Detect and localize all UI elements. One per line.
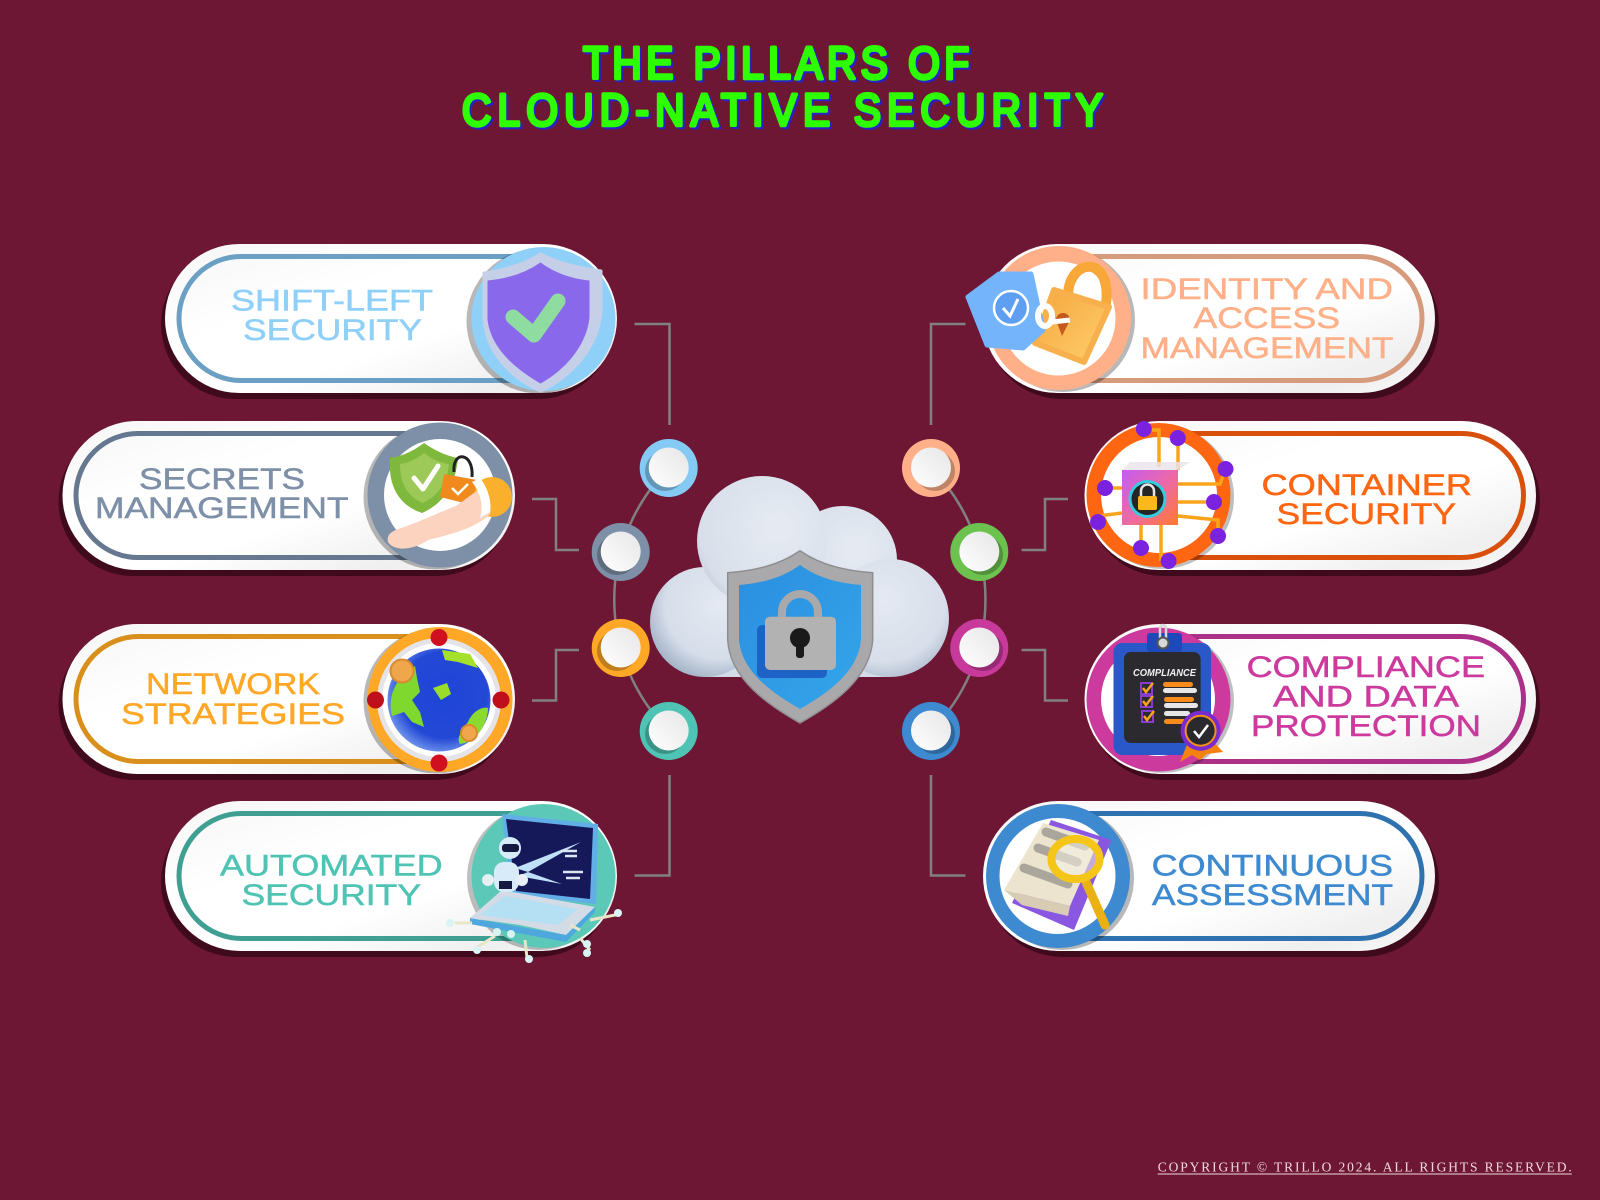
icon: secure chip	[1086, 421, 1234, 569]
node: continuous	[902, 702, 960, 760]
heading: identity and access management: ACCESS	[1194, 302, 1340, 335]
heading: secrets management: MANAGEMENT	[95, 492, 348, 525]
panel: continuous assessment	[983, 801, 1439, 957]
heading: compliance and data protection: AND DATA	[1273, 681, 1459, 714]
copyright: COPYRIGHT © TRILLO 2024. ALL RIGHTS RESERVED.	[1158, 1160, 1572, 1174]
node: secrets	[592, 523, 650, 581]
heading: secrets management: SECRETS	[139, 463, 305, 496]
heading: continuous assessment	[1152, 850, 1393, 912]
heading: identity and access management	[1140, 273, 1394, 365]
node: network	[592, 619, 650, 677]
heading: automated security: SECURITY	[242, 879, 421, 912]
heading: continuous assessment: CONTINUOUS	[1152, 850, 1393, 883]
title	[462, 38, 1103, 136]
heading: container security	[1262, 469, 1472, 531]
heading: continuous assessment: ASSESSMENT	[1152, 879, 1393, 912]
node: identity	[902, 439, 960, 497]
node: compliance	[950, 619, 1008, 677]
heading: automated security	[220, 850, 443, 912]
panel: compliance and data protection	[1084, 624, 1540, 780]
icon: globe	[364, 627, 512, 774]
icon: robot at laptop	[446, 804, 622, 963]
title: CLOUD-NATIVE SECURITY	[462, 85, 1103, 136]
panel: secrets management	[58, 421, 515, 576]
title: THE PILLARS OF	[583, 38, 969, 89]
heading: network strategies	[121, 668, 345, 731]
icon: compliance clipboard: COMPLIANCE	[1133, 668, 1196, 679]
heading: network strategies: STRATEGIES	[121, 698, 345, 731]
node: container	[950, 523, 1008, 581]
heading: container security: SECURITY	[1276, 498, 1456, 531]
heading: compliance and data protection	[1247, 651, 1485, 743]
heading: network strategies: NETWORK	[146, 668, 320, 701]
heading: shift-left security: SHIFT-LEFT	[231, 284, 433, 318]
panel: network strategies	[58, 624, 515, 780]
heading: shift-left security: SECURITY	[243, 314, 422, 347]
heading: shift-left security	[231, 284, 433, 347]
heading: container security: CONTAINER	[1262, 469, 1472, 502]
heading: secrets management	[95, 463, 348, 525]
connector lines	[532, 324, 1068, 876]
panel: automated security	[161, 801, 622, 963]
icon: coins	[390, 660, 477, 741]
heading: identity and access management: MANAGEMENT	[1140, 332, 1394, 365]
node: shift-left	[640, 439, 698, 497]
icon: magnifier over documents	[986, 804, 1134, 950]
panel: container security	[1084, 421, 1540, 576]
panel: identity and access management	[968, 244, 1439, 399]
node: automated	[640, 702, 698, 760]
icon: compliance clipboard	[1086, 625, 1234, 773]
panel: shift-left security	[161, 244, 617, 399]
heading: automated security: AUTOMATED	[220, 850, 443, 883]
icon: padlock with key and badge	[968, 246, 1135, 392]
icon: hand holding shield and lock	[364, 422, 512, 570]
central cloud with shield and lock	[650, 476, 949, 723]
icon: purple shield with check	[466, 247, 616, 394]
heading: compliance and data protection: PROTECTION	[1251, 710, 1481, 743]
heading: identity and access management: IDENTITY AND	[1140, 273, 1393, 306]
heading: compliance and data protection: COMPLIANCE	[1247, 651, 1485, 684]
